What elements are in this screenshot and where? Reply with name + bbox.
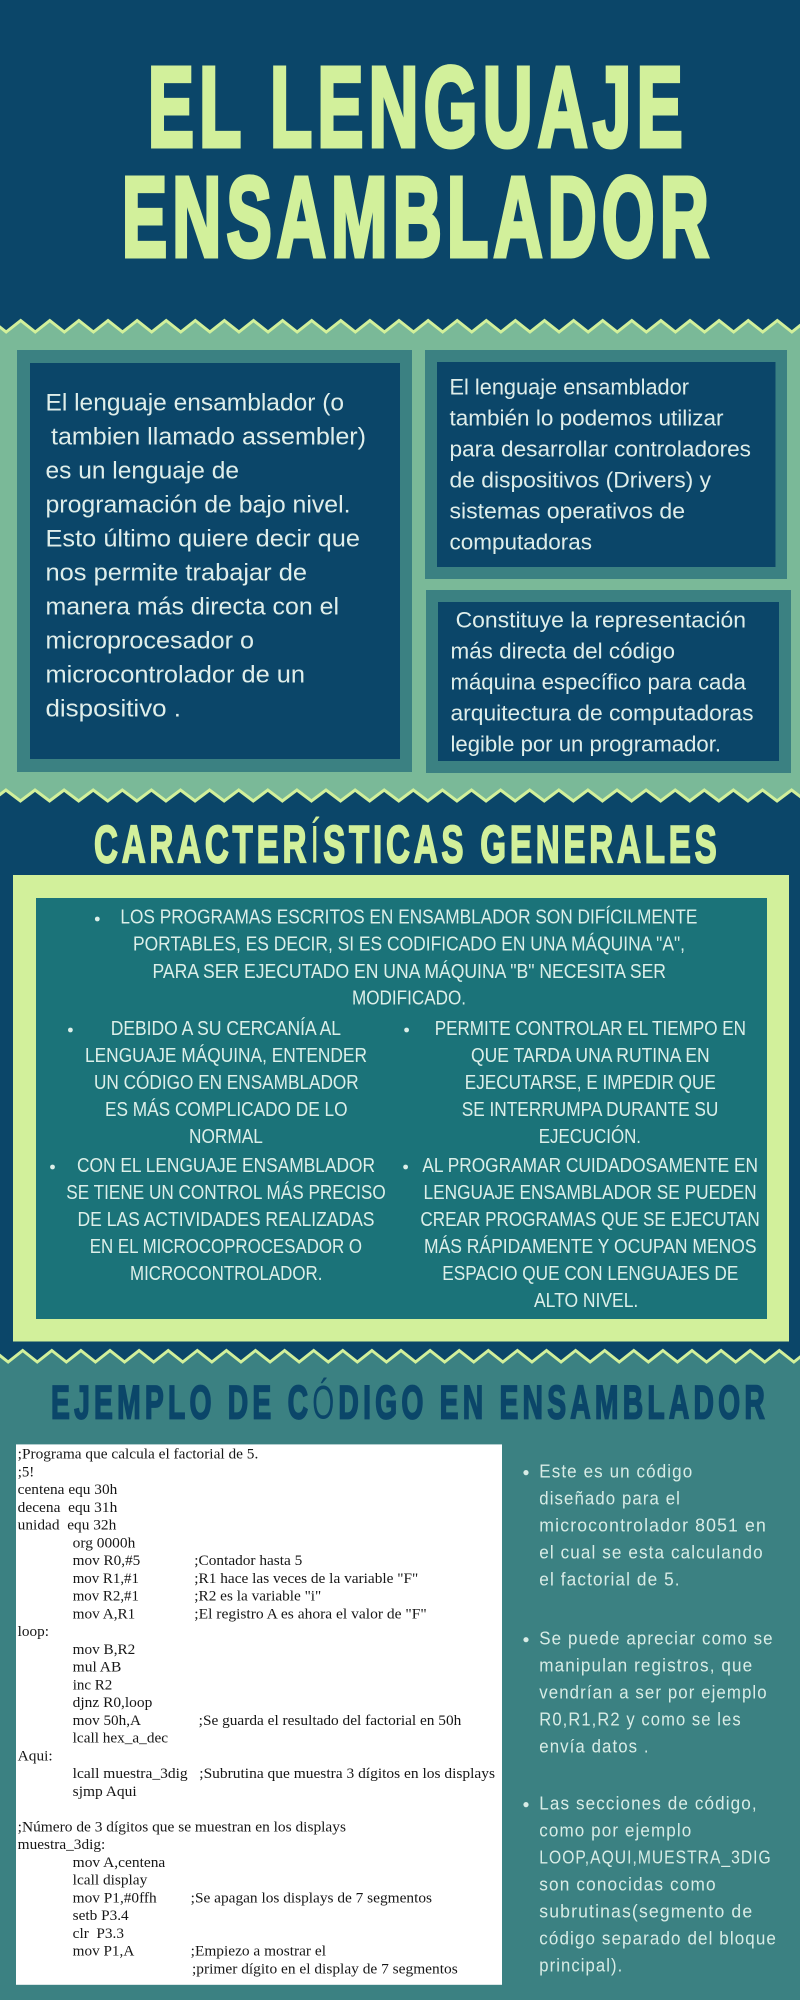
code listing: unidad equ 32h [18, 1518, 117, 1534]
code listing: ;R1 hace las veces de la variable "F" [194, 1571, 418, 1587]
code listing: org 0000h [73, 1535, 136, 1551]
list item: timing control: PERMITE CONTROLAR EL TIEMPO EN [435, 1017, 746, 1040]
text block: definition: manera más directa con el [46, 594, 339, 621]
text block: definition [46, 390, 366, 723]
panel: definition [17, 350, 412, 772]
code listing [16, 1444, 502, 1985]
code listing: ;Se guarda el resultado del factorial en 50h [199, 1713, 462, 1729]
code listing: ;Se apagan los displays de 7 segmentos [191, 1890, 432, 1906]
code listing: muestra_3dig: [18, 1837, 105, 1853]
text block: drivers: El lenguaje ensamblador [450, 374, 689, 399]
text block: drivers: también lo podemos utilizar [450, 405, 724, 430]
explanation: registers: R0,R1,R2 y como se les [539, 1708, 742, 1730]
list item: portability [95, 906, 697, 1010]
code listing: mov R1,#1 [73, 1571, 139, 1587]
text block: definition: es un lenguaje de [46, 458, 239, 485]
list item: timing control: SE INTERRUMPA DURANTE SU [462, 1098, 718, 1121]
code listing: lcall hex_a_dec [73, 1731, 168, 1747]
text block: definition: microcontrolador de un [46, 662, 305, 689]
code listing: ;R2 es la variable "i" [194, 1589, 321, 1605]
code listing: mov 50h,A [73, 1713, 141, 1729]
code listing: mov R0,#5 [73, 1553, 140, 1569]
code listing: Aqui: [18, 1748, 53, 1764]
text block: drivers: sistemas operativos de [450, 498, 685, 524]
code listing: centena equ 30h [18, 1482, 118, 1498]
title [122, 44, 714, 280]
explanation: microcontroller: microcontrolador 8051 en [539, 1514, 767, 1536]
list item: proximity to machine language: LENGUAJE MÁQUINA, ENTENDER [85, 1044, 367, 1067]
section: general characteristics background with zigzag edge [0, 790, 800, 2000]
list item: portability: MODIFICADO. [352, 987, 466, 1010]
code listing: mov A,centena [73, 1855, 166, 1871]
text block: representation: legible por un programador. [450, 731, 721, 756]
text block: definition: Esto último quiere decir que [46, 526, 360, 553]
code listing: ;Empiezo a mostrar el [191, 1944, 326, 1960]
explanation: subroutines: Las secciones de código, [539, 1793, 758, 1814]
explanation: microcontroller: Este es un código [539, 1461, 693, 1482]
code listing: sjmp Aqui [73, 1784, 137, 1800]
explanation: registers: envía datos . [539, 1736, 650, 1756]
list item: timing control: QUE TARDA UNA RUTINA EN [471, 1044, 710, 1067]
list item: speed and size [403, 1154, 760, 1312]
code listing: mov A,R1 [73, 1606, 135, 1622]
text block: definition: programación de bajo nivel. [46, 492, 350, 519]
explanation: microcontroller: el cual se esta calculando [539, 1541, 764, 1562]
list item: timing control [404, 1017, 746, 1148]
text block: representation: máquina específico para cada [450, 669, 746, 694]
list item: portability: LOS PROGRAMAS ESCRITOS EN ENSAMBLADOR SON DIFÍCILMENTE [120, 906, 697, 928]
text block: representation: Constituye la representación [456, 607, 746, 632]
explanation: subroutines: son conocidas como [539, 1874, 717, 1894]
text block: drivers: de dispositivos (Drivers) y [450, 467, 712, 492]
explanation: microcontroller: el factorial de 5. [539, 1568, 681, 1589]
text block: drivers [450, 374, 751, 554]
panel: characteristics [13, 875, 789, 1342]
list item: precise control: CON EL LENGUAJE ENSAMBLADOR [77, 1154, 375, 1177]
list item: proximity to machine language: DEBIDO A SU CERCANÍA AL [111, 1017, 341, 1040]
explanation: microcontroller: diseñado para el [539, 1488, 681, 1509]
explanation: subroutines [523, 1793, 777, 1975]
list item: proximity to machine language: NORMAL [189, 1125, 263, 1148]
text block: definition: nos permite trabajar de [46, 560, 307, 587]
list item: proximity to machine language: ES MÁS COMPLICADO DE LO [105, 1098, 348, 1121]
code listing: ;primer dígito en el display de 7 segmentos [192, 1961, 458, 1977]
code listing: inc R2 [73, 1677, 112, 1693]
code listing: mov P1,A [73, 1944, 134, 1960]
code listing: ;El registro A es ahora el valor de "F" [194, 1606, 427, 1622]
list item: precise control: SE TIENE UN CONTROL MÁS PRECISO [66, 1181, 386, 1204]
code listing: ;Programa que calcula el factorial de 5. [18, 1447, 258, 1463]
code listing: setb P3.4 [73, 1908, 129, 1924]
text block: definition: microprocesador o [46, 628, 254, 655]
text block: drivers: para desarrollar controladores [450, 436, 751, 462]
list item: precise control [50, 1154, 386, 1285]
panel: representation [426, 590, 791, 773]
panel: drivers [425, 350, 787, 579]
list item: proximity to machine language [68, 1017, 367, 1148]
code listing: mov B,R2 [73, 1642, 135, 1658]
code listing: mul AB [73, 1660, 121, 1676]
explanation: subroutines: como por ejemplo [539, 1820, 692, 1841]
text block: definition: El lenguaje ensamblador (o [46, 390, 344, 417]
list item: precise control: EN EL MICROCOPROCESADOR O [90, 1235, 362, 1258]
explanation: microcontroller [523, 1461, 767, 1589]
section: code example background with zigzag edge [0, 1350, 800, 2000]
list item: timing control: EJECUTARSE, E IMPEDIR QUE [465, 1071, 716, 1094]
code listing: ;Contador hasta 5 [194, 1553, 302, 1569]
code listing: djnz R0,loop [73, 1695, 152, 1711]
code listing: loop: [18, 1624, 49, 1640]
text block: representation: más directa del código [450, 638, 675, 663]
code listing: lcall display [73, 1873, 148, 1889]
explanation: registers: Se puede apreciar como se [539, 1628, 774, 1649]
list item: precise control: MICROCONTROLADOR. [130, 1262, 322, 1285]
code listing: lcall muestra_3dig [73, 1766, 188, 1782]
code listing: mov R2,#1 [73, 1589, 139, 1605]
explanation: subroutines: subrutinas(segmento de [539, 1900, 753, 1921]
explanation: subroutines: principal). [539, 1954, 623, 1975]
list item: precise control: DE LAS ACTIVIDADES REALIZADAS [78, 1208, 374, 1231]
text block: definition: dispositivo . [46, 696, 181, 723]
explanation: registers: manipulan registros, que [539, 1655, 753, 1676]
code listing: ;5! [18, 1464, 34, 1480]
code listing: ;Subrutina que muestra 3 dígitos en los displays [199, 1766, 495, 1782]
list item: portability: PORTABLES, ES DECIR, SI ES CODIFICADO EN UNA MÁQUINA "A", [133, 933, 685, 956]
text block: drivers: computadoras [450, 529, 592, 554]
text block: representation [450, 607, 754, 756]
explanation: registers: vendrían a ser por ejemplo [539, 1682, 768, 1703]
code listing: mov P1,#0ffh [73, 1890, 157, 1906]
list item: speed and size: ESPACIO QUE CON LENGUAJES DE [442, 1262, 738, 1285]
code listing: ;Número de 3 dígitos que se muestran en los displays [18, 1819, 346, 1835]
list item: timing control: EJECUCIÓN. [539, 1125, 641, 1148]
code listing: decena equ 31h [18, 1500, 118, 1516]
text block: definition: tambien llamado assembler) [51, 424, 366, 451]
text block: representation: arquitectura de computadoras [450, 700, 754, 725]
explanation: subroutines: código separado del bloque [539, 1927, 777, 1948]
list item: speed and size: ALTO NIVEL. [534, 1289, 638, 1312]
explanation: registers [523, 1628, 774, 1756]
list item: portability: PARA SER EJECUTADO EN UNA MÁQUINA "B" NECESITA SER [152, 960, 666, 983]
code listing: clr P3.3 [73, 1926, 124, 1942]
list item: proximity to machine language: UN CÓDIGO EN ENSAMBLADOR [94, 1071, 359, 1094]
